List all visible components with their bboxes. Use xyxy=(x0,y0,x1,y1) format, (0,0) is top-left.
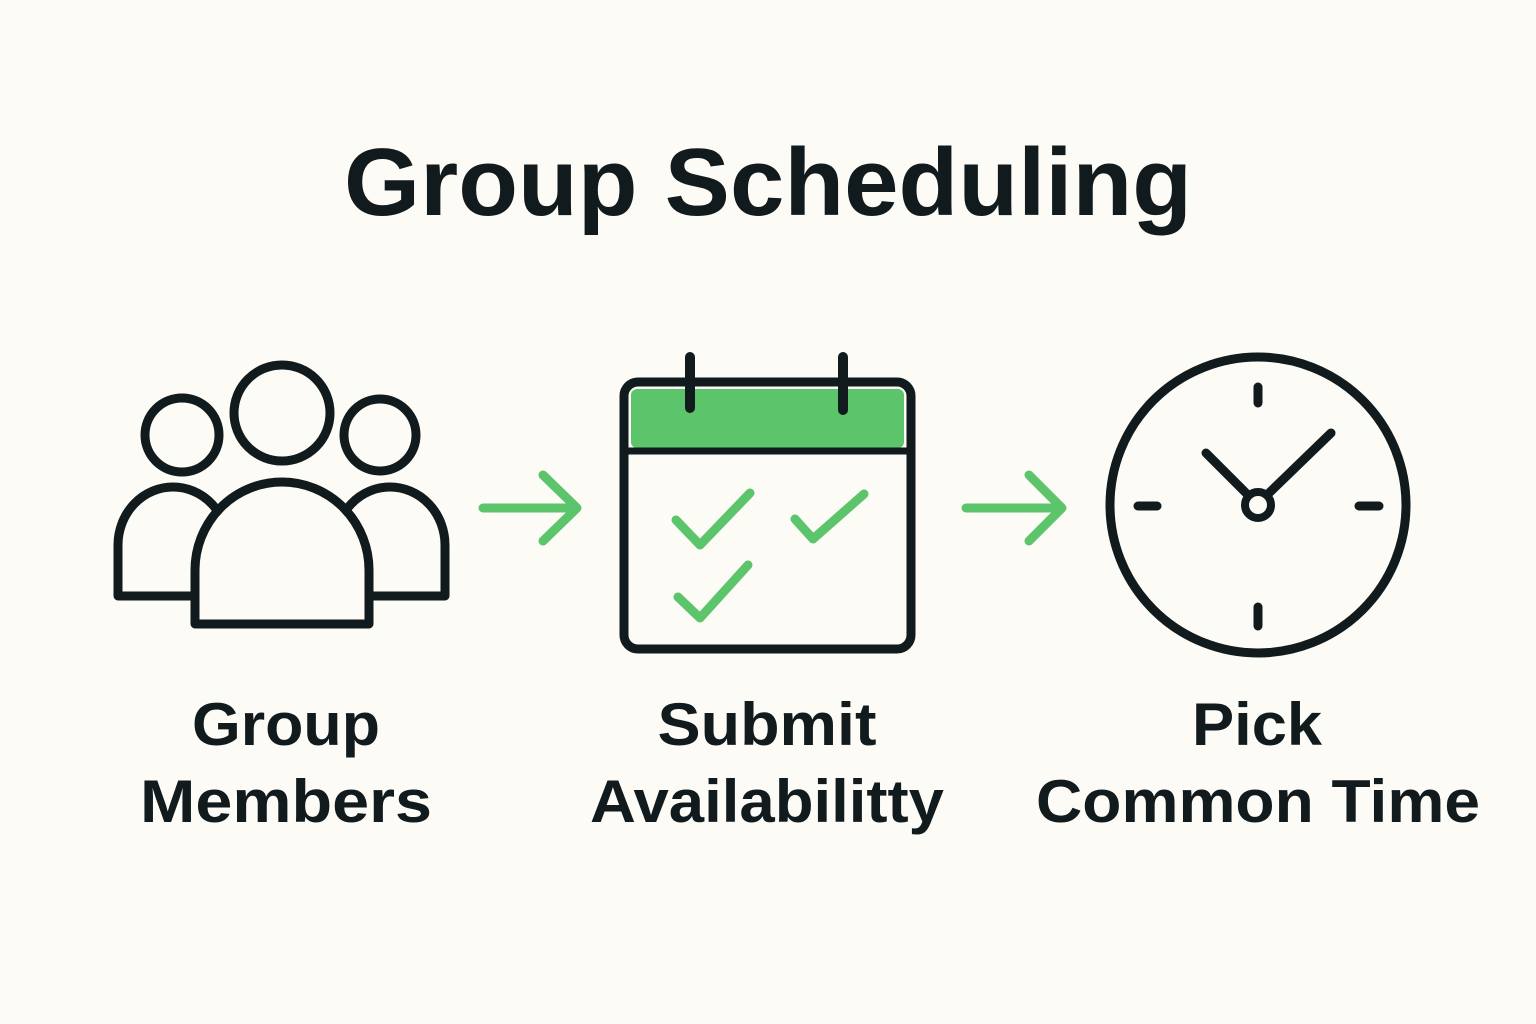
label: pick common time xyxy=(1036,691,1480,835)
label: submit availability xyxy=(590,691,945,835)
label: pick common time: Pick xyxy=(1192,691,1323,758)
label: group members: Group xyxy=(192,691,380,758)
icon: group members xyxy=(118,365,445,624)
label: group members: Members xyxy=(140,768,432,835)
title: Group Scheduling xyxy=(344,129,1192,236)
arrow 1 xyxy=(483,475,577,541)
icon: clock xyxy=(1110,357,1406,653)
label: submit availability: Availabilitty xyxy=(590,768,945,835)
icon: calendar xyxy=(624,357,911,649)
arrow 2 xyxy=(966,475,1062,541)
label: group members xyxy=(140,691,432,835)
label: submit availability: Submit xyxy=(658,691,877,758)
label: pick common time: Common Time xyxy=(1036,768,1480,835)
